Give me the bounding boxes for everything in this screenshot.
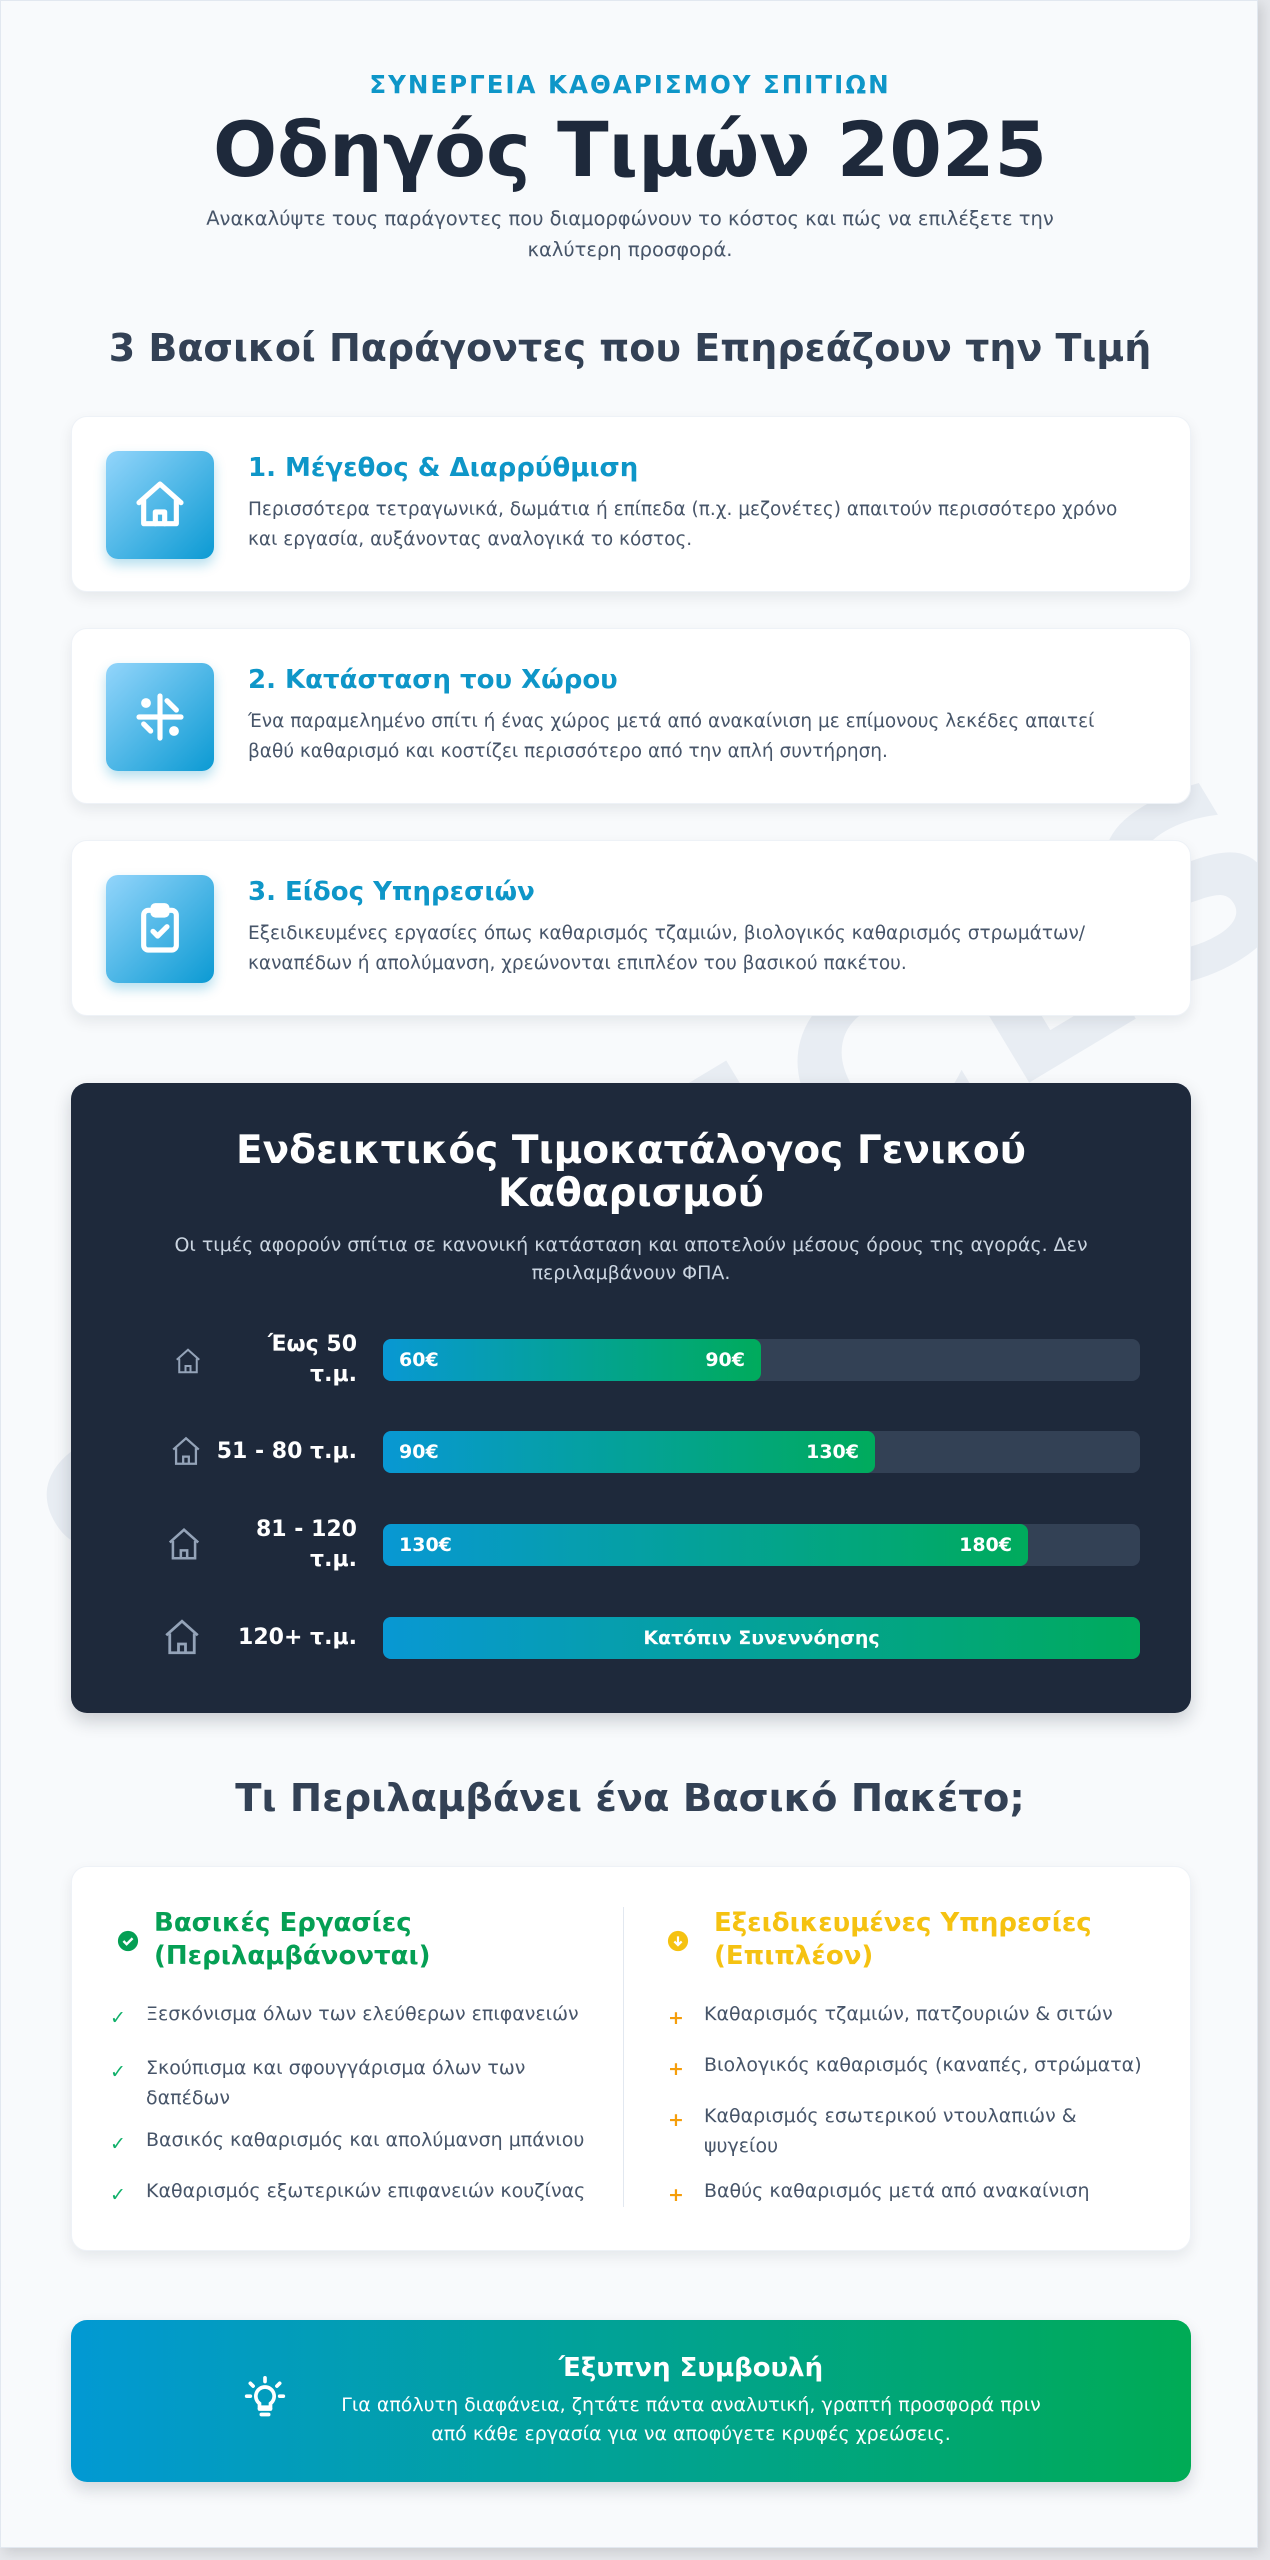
heading	[154, 1908, 431, 1971]
card: services: Εξειδικευμένες εργασίες όπως καθαρισμός τζαμιών, βιολογικός καθαρισμός στρωμάτων/καναπέδων ή απολύμανση, χρεώνονται επιπλέον του βασικού πακέτου.	[248, 923, 1085, 974]
row: up to 50: Έως 50 τ.μ.	[268, 1332, 357, 1387]
row: 51-80: 51 - 80 τ.μ.	[217, 1439, 357, 1464]
column: extra: Καθαρισμός εσωτερικού ντουλαπιών & ψυγείου	[704, 2105, 1077, 2157]
card: condition	[71, 628, 1191, 804]
tip banner	[71, 2320, 1191, 2482]
icon: clipboard	[106, 875, 214, 983]
row: 120+: 120+ τ.μ.	[238, 1625, 357, 1650]
column: extra: +	[668, 2007, 684, 2029]
text: 3. Είδος Υπηρεσιών	[248, 877, 535, 907]
row: 51-80: 130€	[806, 1441, 859, 1463]
row: up to 50: 90€	[705, 1349, 745, 1371]
icon: check circle	[118, 1930, 138, 1952]
list: Ξεσκόνισμα όλων των ελεύθερων επιφανειών	[146, 2003, 579, 2025]
panel subtitle: Οι τιμές αφορούν σπίτια σε κανονική κατάσταση και αποτελούν μέσους όρους της αγοράς. Δεν περιλαμβάνουν ΦΠΑ.	[174, 1234, 1088, 1284]
icon: lightbulb	[244, 2376, 286, 2416]
column: basic: ✓	[110, 2061, 126, 2083]
column: basic	[110, 1908, 585, 2206]
heading: factors: 3 Βασικοί Παράγοντες που Επηρεάζουν την Τιμή	[109, 326, 1151, 370]
icon: house	[106, 451, 214, 559]
card: size	[71, 416, 1191, 592]
column: extra: +	[668, 2109, 684, 2131]
tip text: Για απόλυτη διαφάνεια, ζητάτε πάντα αναλυτική, γραπτή προσφορά πριν από κάθε εργασία για να αποφύγετε κρυφές χρεώσεις.	[341, 2394, 1041, 2445]
text: 1. Μέγεθος & Διαρρύθμιση	[248, 453, 638, 483]
column: basic: Καθαρισμός εξωτερικών επιφανειών κουζίνας	[146, 2180, 585, 2202]
row: 81-120: 180€	[959, 1534, 1012, 1556]
text: 2. Κατάσταση του Χώρου	[248, 665, 618, 695]
column: extra: +	[668, 2184, 684, 2206]
row: 51-80	[172, 1431, 1140, 1473]
row: 81-120	[169, 1517, 1140, 1572]
subtitle: Ανακαλύψτε τους παράγοντες που διαμορφώνουν το κόστος και πώς να επιλέξετε την καλύτερη προσφορά.	[206, 207, 1054, 261]
column: basic: ✓	[110, 2007, 126, 2029]
heading: package: Τι Περιλαμβάνει ένα Βασικό Πακέτο;	[235, 1776, 1025, 1821]
card: services	[71, 840, 1191, 1016]
row: up to 50: 60€	[399, 1349, 439, 1371]
tip title: Έξυπνη Συμβουλή	[559, 2353, 823, 2383]
card: size: Περισσότερα τετραγωνικά, δωμάτια ή επίπεδα (π.χ. μεζονέτες) απαιτούν περισσότερο χρόνο και εργασία, αυξάνοντας αναλογικά το κόστος.	[248, 499, 1117, 550]
panel title: Ενδεικτικός Τιμοκατάλογος Γενικού Καθαρισμού	[236, 1128, 1026, 1216]
column: basic: ✓	[110, 2184, 126, 2206]
row: 120+	[165, 1617, 1140, 1659]
column: basic: Βασικός καθαρισμός και απολύμανση μπάνιου	[146, 2129, 584, 2151]
heading: (Περιλαμβάνονται)	[154, 1941, 431, 1971]
row: up to 50	[176, 1332, 1140, 1387]
column: extra: Βαθύς καθαρισμός μετά από ανακαίνιση	[704, 2180, 1090, 2202]
column: basic: Σκούπισμα και σφουγγάρισμα όλων των δαπέδων	[146, 2057, 525, 2109]
row: 81-120: 130€	[399, 1534, 452, 1556]
heading	[714, 1908, 1092, 1971]
heading: (Επιπλέον)	[714, 1941, 873, 1971]
heading: Βασικές Εργασίες	[154, 1908, 412, 1938]
column: extra	[668, 1908, 1142, 2206]
row: 51-80: 90€	[399, 1441, 439, 1463]
row: 120+: Κατόπιν Συνεννόησης	[643, 1627, 880, 1649]
heading: Εξειδικευμένες Υπηρεσίες	[714, 1908, 1092, 1938]
panel: price list	[71, 1083, 1191, 1713]
title: Οδηγός Τιμών 2025	[213, 106, 1047, 194]
eyebrow: ΣΥΝΕΡΓΕΙΑ ΚΑΘΑΡΙΣΜΟΥ ΣΠΙΤΙΩΝ	[369, 70, 891, 99]
icon: sparkle	[106, 663, 214, 771]
icon: plus circle	[668, 1930, 688, 1952]
column: basic: ✓	[110, 2133, 126, 2155]
list: Καθαρισμός τζαμιών, πατζουριών & σιτών	[704, 2003, 1113, 2025]
column: extra: +	[668, 2058, 684, 2080]
column: extra: Βιολογικός καθαρισμός (καναπές, στρώματα)	[704, 2054, 1142, 2076]
card: condition: Ένα παραμελημένο σπίτι ή ένας χώρος μετά από ανακαίνιση με επίμονους λεκέδες απαιτεί βαθύ καθαρισμό και κοστίζει περισσότερο από την απλή συντήρηση.	[248, 711, 1094, 762]
row: 81-120: 81 - 120 τ.μ.	[256, 1517, 357, 1572]
panel: package	[71, 1866, 1191, 2251]
